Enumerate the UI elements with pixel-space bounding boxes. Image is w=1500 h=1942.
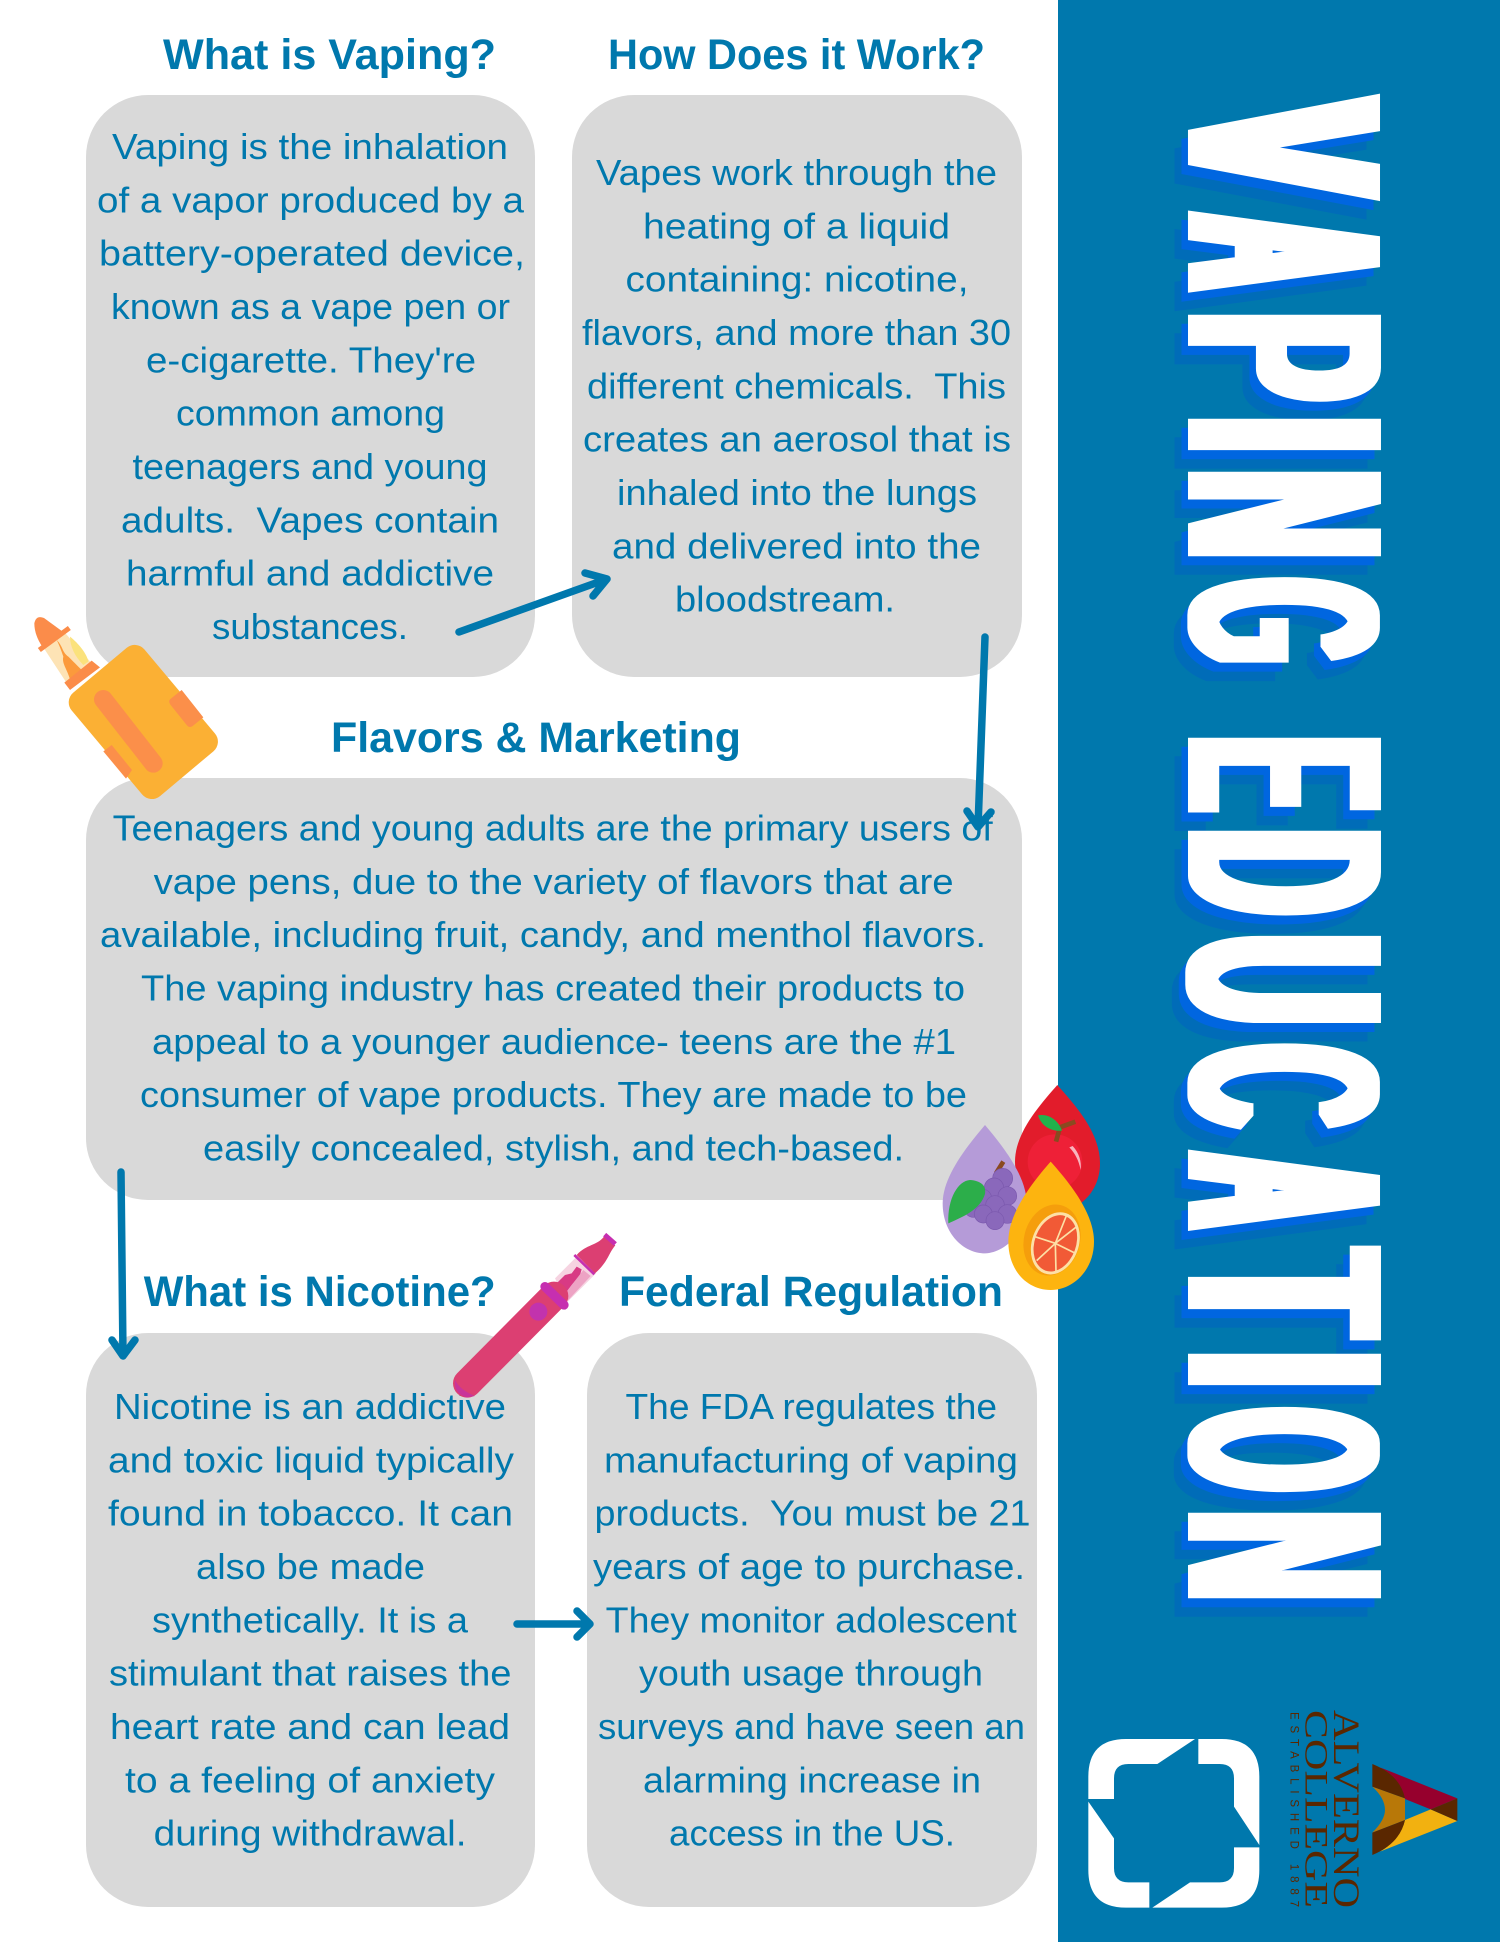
heading: What is Nicotine?: What is Nicotine? xyxy=(144,1268,496,1316)
panel: flavors and marketing: vape pens, due to the variety of flavors that are xyxy=(154,861,954,902)
title: Vaping Education: N xyxy=(1127,1510,1441,1601)
panel: federal regulation xyxy=(587,1333,1037,1907)
logo wordmark: College: COLLEGE xyxy=(1298,1710,1334,1908)
panel: federal regulation: products. You must be 21 xyxy=(594,1493,1030,1534)
panel: federal regulation: surveys and have seen an xyxy=(598,1706,1025,1747)
panel: flavors and marketing: easily concealed, stylish, and tech-based. xyxy=(203,1128,904,1168)
icon: grapefruit drop xyxy=(1008,1162,1094,1290)
heading: Federal Regulation: Federal Regulation xyxy=(619,1268,1003,1316)
panel: what is vaping: adults. Vapes contain xyxy=(121,499,499,540)
panel: federal regulation: manufacturing of vaping xyxy=(604,1439,1018,1480)
panel: how does it work: Vapes work through the xyxy=(596,152,997,193)
title: Vaping Education: G xyxy=(1132,579,1437,663)
panel: how does it work: flavors, and more than 30 xyxy=(582,312,1011,353)
panel: flavors and marketing xyxy=(86,778,1022,1200)
logo wordmark: Alverno: ALVERNO xyxy=(1325,1710,1366,1908)
panel: how does it work: bloodstream. xyxy=(675,579,895,620)
panel: what is vaping xyxy=(86,95,535,677)
heading: What is Vaping?: What is Vaping? xyxy=(163,31,496,79)
panel: how does it work: different chemicals. This xyxy=(587,365,1006,406)
title: Vaping Education: O xyxy=(1132,1408,1437,1491)
panel: federal regulation: youth usage through xyxy=(639,1653,983,1694)
title: Vaping Education: A xyxy=(1135,216,1432,287)
title: Vaping Education: A xyxy=(1135,1156,1432,1225)
title: Vaping Education: V xyxy=(1136,102,1433,193)
heading: How Does it Work?: How Does it Work? xyxy=(608,31,985,79)
icon: Alverno A mark xyxy=(1372,1764,1457,1855)
icon: apple drop xyxy=(1015,1085,1100,1212)
panel: what is vaping: e-cigarette. They're xyxy=(146,339,476,380)
panel: what is nicotine: stimulant that raises the xyxy=(109,1653,512,1694)
panel: what is vaping: harmful and addictive xyxy=(126,553,494,594)
panel: flavors and marketing: available, including fruit, candy, and menthol flavors. xyxy=(100,914,986,955)
panel: how does it work: inhaled into the lungs xyxy=(617,472,977,513)
title: Vaping Education: T xyxy=(1127,1250,1441,1336)
panel: what is vaping: battery-operated device, xyxy=(99,233,525,274)
icon: white square logo xyxy=(1088,1739,1259,1908)
panel: what is nicotine: found in tobacco. It can xyxy=(108,1493,513,1534)
icon: pink vape pen xyxy=(455,1235,615,1397)
panel: federal regulation: alarming increase in xyxy=(643,1759,981,1800)
arrow: nicotine to regulation xyxy=(517,1611,590,1637)
panel: what is vaping: substances. xyxy=(212,606,408,647)
panel: how does it work: containing: nicotine, xyxy=(626,259,968,300)
logo: Alverno College xyxy=(1288,1710,1457,1908)
panel: flavors and marketing: The vaping industry has created their products to xyxy=(141,968,965,1008)
icon: grape drop xyxy=(943,1125,1027,1253)
panel: what is nicotine: to a feeling of anxiety xyxy=(125,1759,495,1800)
panel: what is vaping: teenagers and young xyxy=(132,446,488,487)
logo tagline: Established 1887: ESTABLISHED 1887 xyxy=(1288,1712,1300,1907)
heading: Flavors & Marketing: Flavors & Marketing xyxy=(331,714,741,762)
panel: how does it work: and delivered into the xyxy=(612,525,981,566)
icon: fruit flavor drops xyxy=(943,1085,1100,1290)
panel: what is vaping: of a vapor produced by a xyxy=(97,179,525,220)
panel: what is nicotine: heart rate and can lead xyxy=(110,1706,510,1747)
panel: blue title sidebar xyxy=(1058,0,1500,1942)
icon: orange vape device xyxy=(34,617,223,804)
panel: federal regulation: access in the US. xyxy=(669,1813,955,1854)
panel: flavors and marketing: appeal to a younger audience- teens are the #1 xyxy=(152,1021,956,1062)
arrow: vaping to how it works xyxy=(459,573,607,632)
panel: what is nicotine: during withdrawal. xyxy=(154,1813,467,1854)
panel: how does it work: heating of a liquid xyxy=(643,205,950,246)
arrow: flavors to nicotine xyxy=(112,1172,135,1356)
title: Vaping Education: I xyxy=(1128,416,1442,453)
title: Vaping Education: P xyxy=(1128,312,1441,400)
title: Vaping Education xyxy=(1127,102,1442,1601)
arrow: how it works to flavors xyxy=(967,637,991,827)
panel: federal regulation: The FDA regulates the xyxy=(626,1386,997,1427)
panel: what is nicotine: synthetically. It is a xyxy=(152,1599,469,1640)
panel: how does it work: creates an aerosol that is xyxy=(583,419,1011,460)
panel: how does it work xyxy=(572,95,1022,677)
panel: federal regulation: They monitor adolescent xyxy=(606,1599,1017,1640)
title: Vaping Education: E xyxy=(1128,736,1440,811)
panel: federal regulation: years of age to purchase. xyxy=(593,1546,1025,1587)
panel: what is nicotine xyxy=(86,1333,535,1907)
title: Vaping Education: I xyxy=(1128,1351,1442,1388)
panel: flavors and marketing: consumer of vape products. They are made to be xyxy=(140,1074,967,1115)
panel: what is vaping: known as a vape pen or xyxy=(111,286,510,327)
panel: flavors and marketing: Teenagers and young adults are the primary users of xyxy=(113,808,994,848)
panel: what is nicotine: also be made xyxy=(196,1546,425,1587)
panel: what is vaping: common among xyxy=(176,393,445,434)
title: Vaping Education: U xyxy=(1127,934,1441,1025)
title: Vaping Education: D xyxy=(1128,829,1442,914)
title: Vaping Education: N xyxy=(1128,470,1442,559)
panel: what is nicotine: Nicotine is an addictive xyxy=(114,1386,506,1427)
title: Vaping Education: C xyxy=(1131,1045,1435,1127)
panel: what is vaping: Vaping is the inhalation xyxy=(112,126,508,167)
panel: what is nicotine: and toxic liquid typically xyxy=(108,1439,514,1480)
